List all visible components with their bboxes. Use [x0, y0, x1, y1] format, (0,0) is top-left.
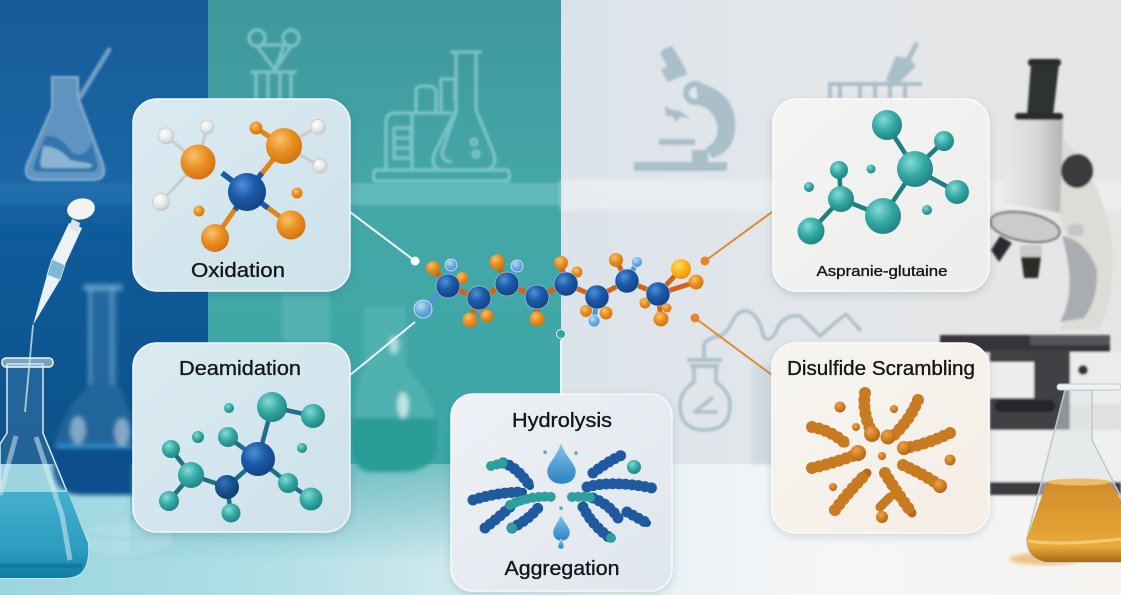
chain bonds [423, 260, 696, 321]
panel: disulfide scrambling [772, 343, 989, 533]
icon: background microscope [634, 46, 735, 171]
panel: asparagine-glutamine [773, 99, 989, 291]
icon: background flask in blue panel [26, 50, 109, 180]
yellow sulfur atom [671, 259, 691, 279]
connector lines and dots [350, 212, 772, 394]
carbon backbone atoms [436, 269, 670, 310]
label: asparagine-glutamine: Aspranie-glutaine [816, 263, 948, 280]
light blue atoms [414, 256, 642, 327]
panel: hydrolysis and aggregation [451, 394, 672, 591]
icon: petri dish [77, 513, 173, 557]
label: deamidation: Deamidation [179, 358, 301, 380]
icon: background waveform and bulb [680, 311, 860, 430]
icon: blurred round flask centre teal [282, 294, 437, 472]
orange bead strands [812, 393, 950, 513]
teal bead [627, 460, 641, 474]
icon: background lab apparatus in teal panel [249, 30, 510, 181]
label: hydrolysis: Hydrolysis [512, 410, 612, 432]
molecule: deamidation [159, 392, 325, 522]
icon: pipette [25, 196, 97, 412]
icon: conical flask with blue liquid [0, 358, 88, 578]
aggregate bead strands [473, 455, 652, 538]
label: oxidation: Oxidation [191, 260, 285, 282]
icon: microscope [940, 59, 1121, 495]
orange atoms [426, 253, 704, 328]
panel: oxidation [133, 99, 350, 291]
icon: water drops [543, 443, 578, 549]
orange droplets [829, 402, 956, 523]
label: aggregation: Aggregation [504, 558, 620, 580]
icon: blurred round flask back left [53, 284, 133, 495]
icon: background test tube rack [830, 42, 922, 98]
panel: deamidation [133, 343, 350, 532]
central peptide chain molecule [414, 253, 704, 328]
icon: conical flask with amber liquid [1009, 384, 1121, 565]
molecule: oxidation [152, 120, 327, 252]
label: disulfide scrambling: Disulfide Scrambling [787, 358, 975, 380]
molecule: asparagine-glutamine [798, 110, 969, 244]
